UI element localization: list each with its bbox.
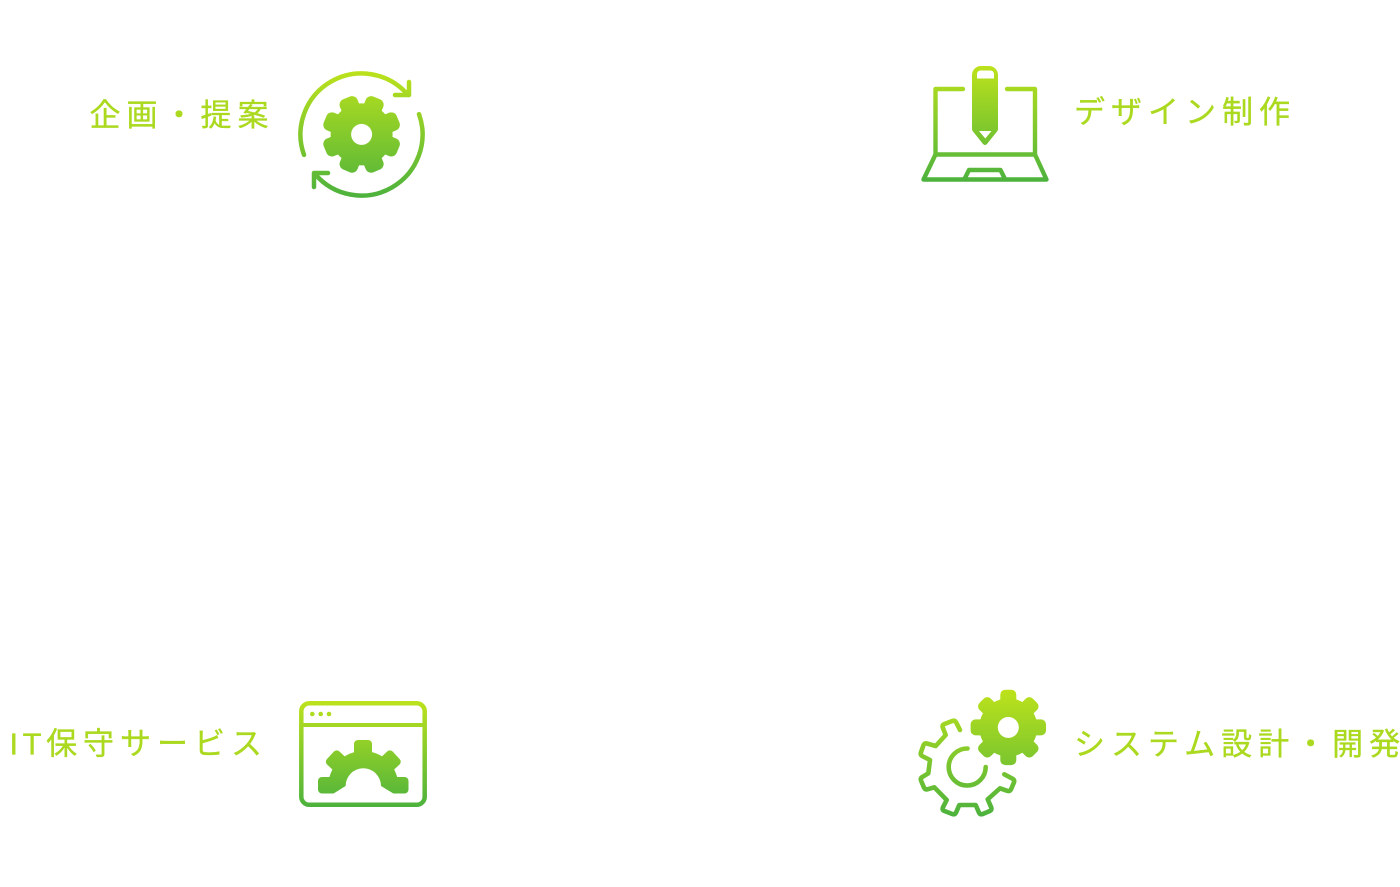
panel: system design and development (921, 685, 1400, 814)
icon: gear with circular arrows (300, 73, 423, 196)
heading: planning and proposal: 企画・提案 (90, 98, 274, 133)
icon: laptop with pencil (924, 66, 1046, 180)
panel: design production (924, 66, 1296, 180)
panel: planning and proposal (90, 73, 423, 196)
heading: IT maintenance service: IT保守サービス (10, 726, 268, 762)
heading: system design and development: システム設計・開発 (1074, 727, 1400, 762)
icon: two gears (921, 685, 1051, 814)
heading: design production: デザイン制作 (1074, 95, 1296, 130)
icon: browser window with gear (301, 703, 425, 805)
panel: IT maintenance service (10, 703, 425, 805)
